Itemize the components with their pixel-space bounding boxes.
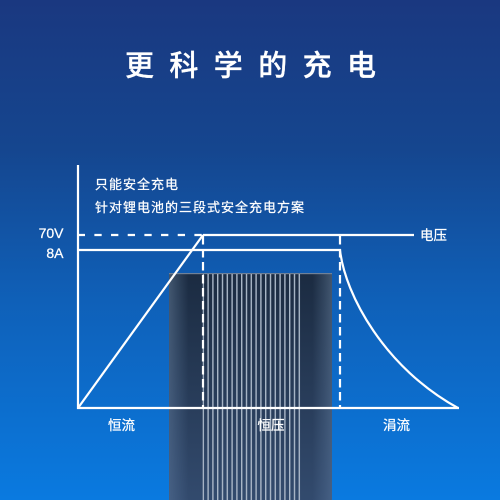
heat-sink ribs: [203, 274, 301, 500]
phase divider right: [339, 236, 341, 408]
product: ribbed charger body: [169, 273, 332, 500]
title: 更科学的充电: [125, 50, 391, 82]
phase divider left: [202, 236, 204, 408]
charging curve chart: [78, 165, 459, 408]
axis labels: 涓流: [383, 418, 410, 433]
voltage line dashed section: [79, 234, 203, 236]
current line: [78, 250, 458, 408]
ramp line: [78, 235, 203, 408]
axis labels: 电压: [420, 228, 447, 243]
chart subtitle: 只能安全充电: [95, 177, 179, 192]
axis labels: [39, 225, 447, 433]
axis labels: 70V: [39, 225, 64, 241]
voltage line solid section: [203, 234, 414, 236]
chart subtitle: [95, 177, 305, 215]
axes: [78, 165, 459, 408]
axis labels: 恒压: [258, 418, 284, 433]
axis labels: 恒流: [108, 418, 135, 433]
axis labels: 8A: [46, 245, 64, 261]
chart subtitle: 针对锂电池的三段式安全充电方案: [95, 200, 305, 215]
